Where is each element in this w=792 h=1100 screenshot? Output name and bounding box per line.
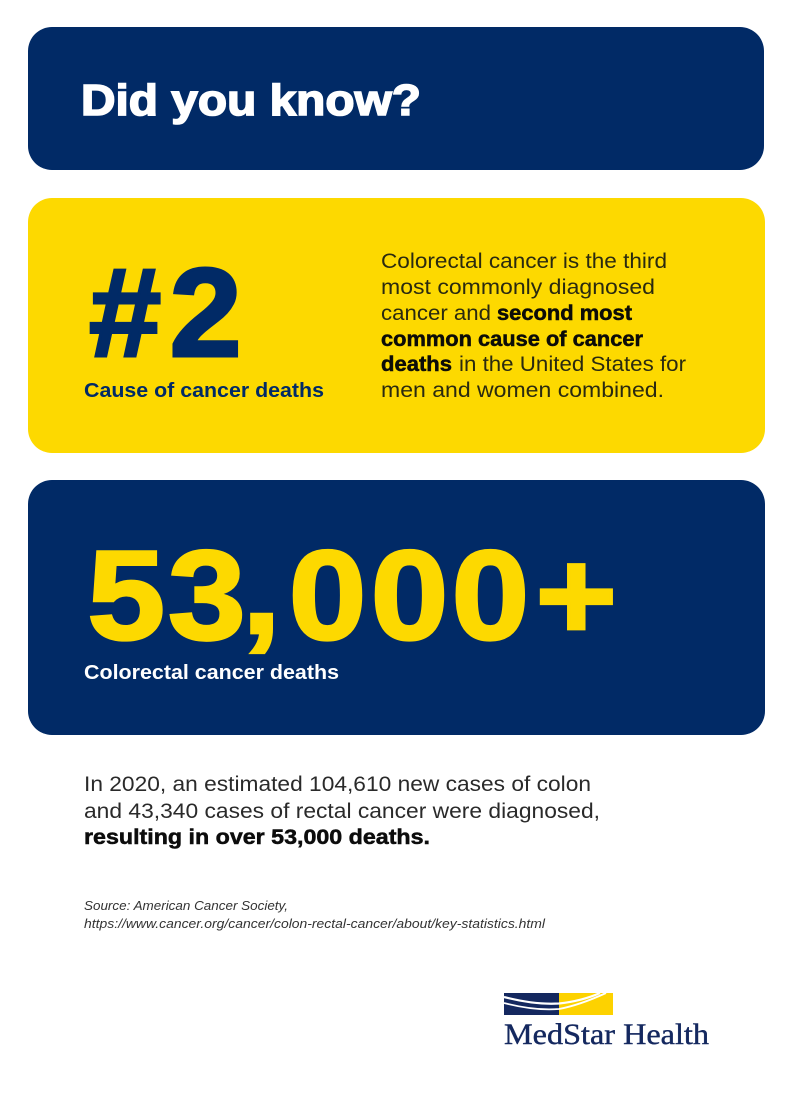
logo: MedStar Health bbox=[504, 993, 709, 1051]
source note: Source: American Cancer Society, bbox=[84, 898, 288, 913]
text block: colorectal description bbox=[381, 250, 686, 402]
big stat: 53,000+: 53,000+ bbox=[87, 519, 617, 667]
source note bbox=[84, 898, 546, 931]
text block: colorectal description: second most bbox=[497, 302, 632, 325]
stat label: colorectal cancer deaths: Colorectal cancer deaths bbox=[84, 661, 339, 684]
source note: https://www.cancer.org/cancer/colon-rectal-cancer/about/key-statistics.html bbox=[84, 916, 546, 931]
text block: colorectal description: Colorectal cancer is the third bbox=[381, 250, 667, 273]
text block: colorectal description: deaths bbox=[381, 353, 452, 376]
text block: 2020 estimates bbox=[84, 773, 600, 849]
text block: colorectal description: common cause of cancer bbox=[381, 328, 643, 351]
text block: colorectal description: most commonly diagnosed bbox=[381, 276, 655, 299]
panel: number two cause bbox=[28, 198, 765, 453]
text block: colorectal description: men and women combined. bbox=[381, 379, 664, 402]
panel: did you know header bbox=[28, 27, 764, 170]
logo: MedStar Health: MedStar Health bbox=[504, 1018, 709, 1051]
text block: 2020 estimates: and 43,340 cases of rectal cancer were diagnosed, bbox=[84, 800, 600, 823]
big stat: number two: #2 bbox=[89, 243, 242, 384]
text block: colorectal description: in the United States for bbox=[459, 353, 686, 376]
text block: 2020 estimates: resulting in over 53,000 deaths. bbox=[84, 826, 430, 849]
heading: did you know: Did you know? bbox=[81, 76, 421, 125]
text block: 2020 estimates: In 2020, an estimated 104,610 new cases of colon bbox=[84, 773, 591, 796]
text block: colorectal description: cancer and bbox=[381, 302, 491, 325]
panel: deaths stat bbox=[28, 480, 765, 735]
stat label: cause of cancer deaths: Cause of cancer deaths bbox=[84, 380, 324, 402]
